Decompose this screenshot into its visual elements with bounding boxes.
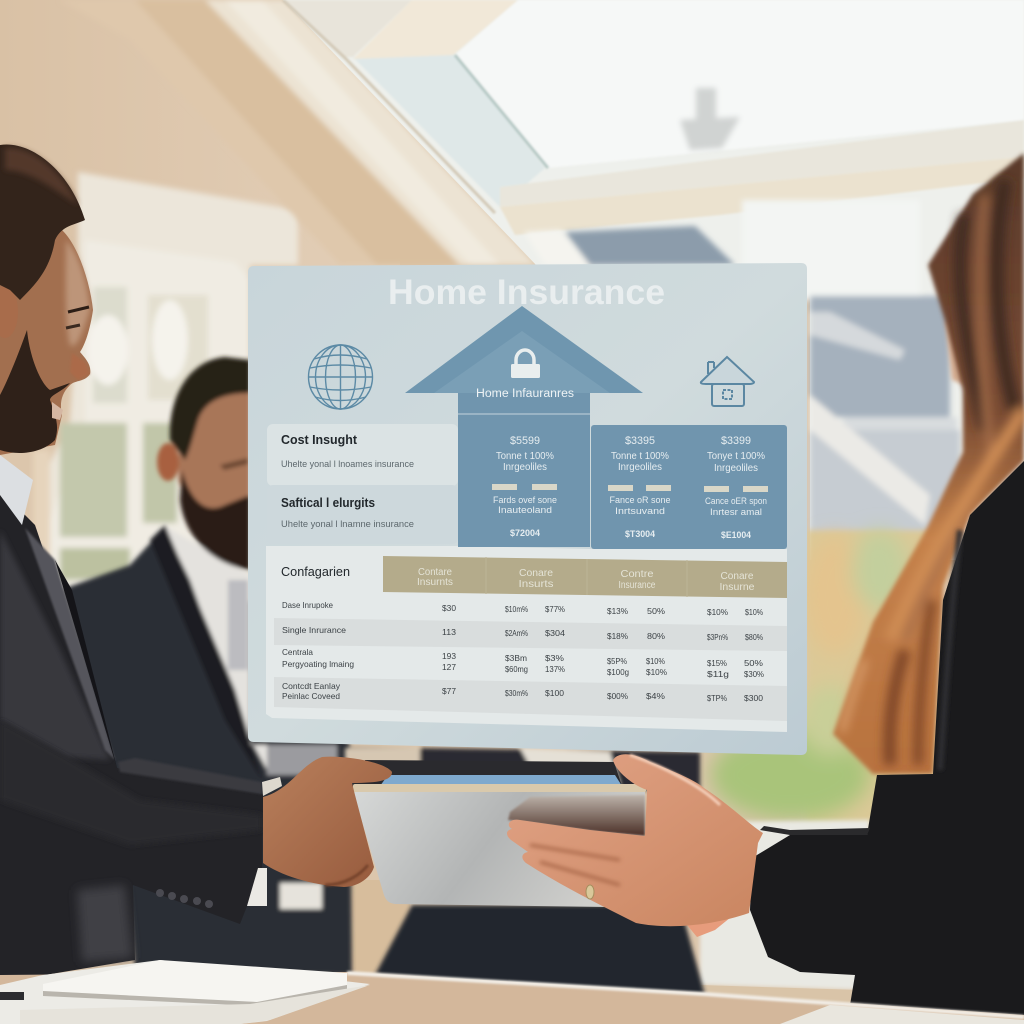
table row three: 127 [442, 662, 456, 672]
left man in suit [0, 144, 282, 982]
ear [0, 286, 18, 338]
price columns two and three [591, 425, 787, 549]
left info row: cost insight: Cost Insught [281, 433, 358, 447]
price column two text: Tonne t 100% [611, 451, 669, 462]
table header band: Insurnts [417, 577, 453, 588]
price column two text [608, 435, 671, 540]
price column one text: $72004 [510, 528, 541, 539]
table header band: Insurts [518, 579, 554, 590]
chimney in distance [680, 88, 740, 150]
cuff buttons [156, 889, 213, 908]
table row three: Pergyoating lmaing [282, 659, 354, 669]
table row one: $13% [607, 606, 628, 616]
table row three [282, 647, 764, 679]
beard [0, 330, 70, 453]
man's face [0, 225, 93, 455]
left info row: safety insights: Saftical l elurgits [281, 496, 375, 510]
ring [586, 885, 594, 899]
table row three: $5P% [607, 656, 627, 666]
house label: Home Infauranres [476, 388, 574, 400]
comparison table [266, 546, 787, 732]
table row three: 193 [442, 651, 456, 661]
shaded rows [274, 618, 787, 721]
price column three text: $E1004 [721, 530, 752, 541]
price column three text: $3399 [721, 435, 751, 447]
table row one: $30 [442, 603, 456, 613]
skylight and outdoor view [283, 0, 1024, 830]
house pricing column [405, 306, 643, 547]
price column three text: Tonye t 100% [707, 451, 765, 462]
price column two text: Inrtsuvand [615, 506, 665, 516]
table row one [282, 600, 763, 617]
price column one text: Inrgeoliles [503, 462, 547, 473]
price column three text: Inrgeoliles [714, 463, 758, 474]
table row four [282, 681, 763, 703]
table row three: $11g [707, 669, 729, 679]
man's hand [263, 757, 392, 887]
table row two: $304 [545, 628, 565, 638]
shirt cuff [247, 868, 267, 906]
woman's hands [507, 754, 763, 937]
table row three: 137% [545, 664, 565, 674]
price column one text: Tonne t 100% [496, 451, 554, 462]
table [0, 960, 1024, 1024]
table row three: Centrala [282, 647, 313, 657]
table row three: $3% [545, 653, 564, 663]
table row three: $30% [744, 669, 764, 679]
torso and sleeve [0, 490, 263, 982]
woman's face edge [945, 320, 965, 385]
table row one: $77% [545, 604, 565, 614]
foliage right [700, 530, 908, 1010]
table header band: Insurance [618, 580, 656, 591]
table header band: Contare [418, 567, 452, 578]
price column one text: $5599 [510, 435, 540, 447]
table row three: $15% [707, 658, 727, 668]
tablet body [352, 788, 645, 907]
table row four: $77 [442, 686, 456, 696]
table row three: $60mg [505, 664, 528, 674]
price column two text: $3395 [625, 435, 655, 447]
comparison heading: Confagarien [281, 564, 350, 579]
table row two: Single Inrurance [282, 625, 346, 635]
icon: globe [308, 345, 372, 409]
table header band [383, 556, 787, 598]
table row three: 50% [744, 658, 763, 668]
tablet rear screen [352, 760, 622, 786]
table row four: Contcdt Eanlay [282, 681, 341, 691]
table row one: Dase Inrupoke [282, 600, 333, 610]
table row one: $10% [707, 607, 728, 617]
table row one: $10m% [505, 604, 528, 614]
table row three: $10% [646, 667, 667, 677]
icon: house outline [701, 357, 754, 406]
collar [0, 455, 33, 525]
left info row: safety insights [267, 485, 458, 544]
icon: padlock [511, 350, 540, 378]
rear sleeve highlight [118, 758, 262, 794]
table header band: Conare [720, 571, 754, 582]
table row two: 113 [442, 627, 456, 637]
table row two: $80% [745, 632, 763, 642]
table row four: $300 [744, 693, 763, 703]
thumb and palm [507, 754, 763, 926]
table row four: $TP% [707, 693, 727, 703]
table row three: $10% [646, 656, 665, 666]
table row three: $3Bm [505, 653, 527, 663]
table row four: Peinlac Coveed [282, 691, 340, 701]
table row three: $100g [607, 667, 629, 677]
table row two: $3Pn% [707, 632, 728, 642]
table row two: 80% [647, 631, 665, 641]
table row two: $18% [607, 631, 628, 641]
table header band: Contre [620, 569, 654, 580]
woman with long hair [750, 153, 1024, 1016]
table row two [282, 625, 763, 642]
head [157, 443, 179, 481]
left info row: cost insight [267, 424, 458, 486]
price column three text: Cance oER spon [705, 496, 767, 506]
price column three text [704, 435, 768, 541]
background man [63, 357, 352, 975]
panel: home insurance glass card [248, 263, 807, 755]
left info row: safety insights: Uhelte yonal l lnamne insurance [281, 519, 414, 530]
table row one: 50% [647, 606, 665, 616]
price column one text: Inauteoland [498, 505, 552, 515]
lower finger [683, 913, 736, 937]
price column two text: $T3004 [625, 529, 656, 540]
table row one: $10% [745, 607, 763, 617]
table row four: $4% [646, 691, 665, 701]
rear window on left wall [33, 172, 298, 760]
roof beam [60, 0, 536, 265]
table row two: $2Am% [505, 628, 528, 638]
table header band: Insurne [720, 582, 755, 593]
price column three text: Inrtesr amal [710, 507, 762, 517]
hair [833, 153, 1024, 774]
left info row: cost insight: Uhelte yonal l lnoames insurance [281, 459, 414, 470]
table row four: $00% [607, 691, 628, 701]
price column one text: Fards ovef sone [493, 495, 557, 505]
jacket [750, 461, 1024, 1016]
price column two text: Inrgeoliles [618, 462, 662, 473]
man's hair [0, 144, 85, 300]
papers [0, 960, 370, 1024]
table row four: $30m% [505, 688, 528, 698]
seated figure below tablet [345, 747, 705, 995]
tablet [352, 760, 646, 907]
price column two text: Fance oR sone [610, 495, 670, 505]
table header band: Conare [519, 568, 553, 579]
title: Home Insurance [388, 273, 665, 312]
brow and eye [68, 307, 89, 312]
table row four: $100 [545, 688, 564, 698]
price column one text [492, 435, 557, 539]
